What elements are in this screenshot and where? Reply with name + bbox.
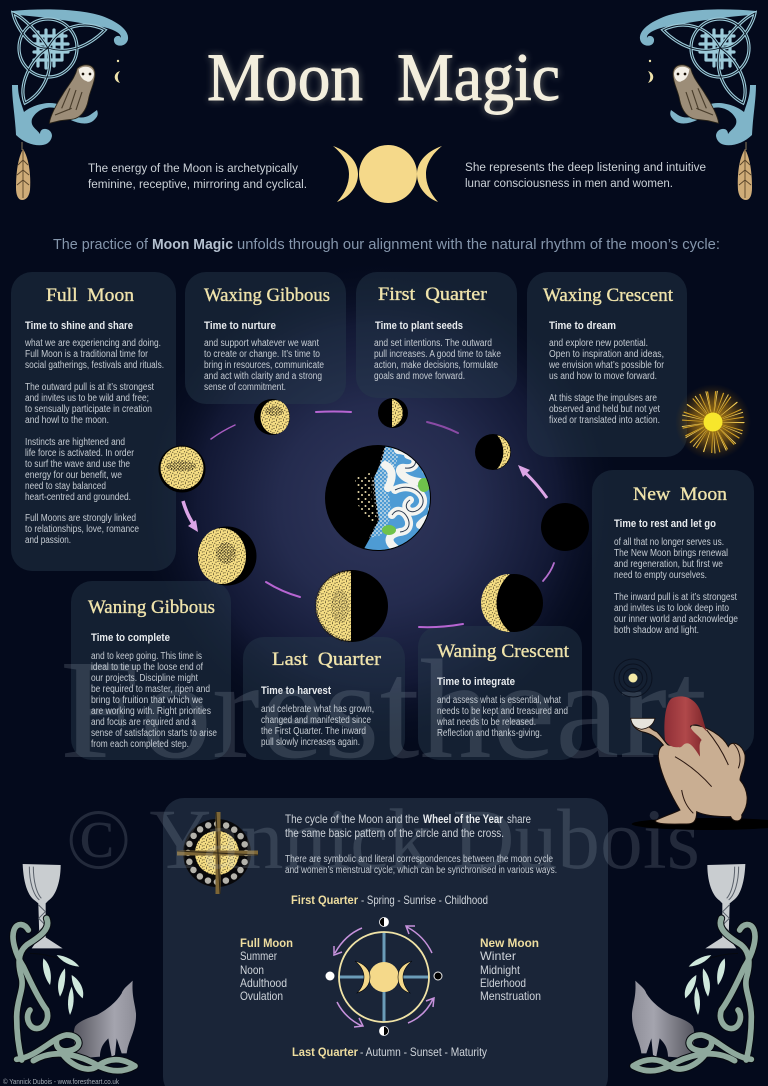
text: waning crescent: Time to integrate [437, 676, 515, 688]
text: waxing gibbous [204, 320, 324, 393]
intro text left [88, 161, 307, 191]
text: waning gibbous: sense of satisfaction starts to arise [91, 728, 217, 739]
text: last quarter: the First Quarter. The inward [261, 726, 366, 737]
ornament: top left knot, owl and feather [12, 9, 128, 200]
text: full moon: need to stay balanced [25, 481, 106, 492]
small moon: full [326, 972, 334, 980]
text: waning gibbous: and to keep going. This time is [91, 651, 202, 662]
text: wheel intro [285, 813, 557, 876]
intro text right: lunar consciousness in men and women. [465, 176, 673, 190]
ornament: bottom left chalice, vine and wolf [13, 864, 136, 1071]
label: first quarter correspondences: - Spring - Sunrise - Childhood [361, 894, 488, 907]
heading: waning crescent: Waning Crescent [437, 641, 570, 662]
text: new moon: our inner world and acknowledge [614, 614, 738, 625]
text: wheel intro: There are symbolic and literal correspondences between the moon cycle [285, 854, 553, 865]
icon: chalice [23, 864, 63, 948]
label: first quarter correspondences: First Quarter [291, 893, 358, 907]
label: last quarter correspondences: Last Quarter [292, 1045, 358, 1059]
text: full moon: social gatherings, festivals and rituals. [25, 360, 164, 371]
intro text left: The energy of the Moon is archetypically [88, 161, 299, 175]
ornament: top right knot, owl and feather [640, 9, 756, 200]
heading: waning gibbous: Waning Gibbous [88, 597, 215, 618]
text: full moon: Time to shine and share [25, 320, 133, 332]
moon: new [541, 503, 589, 551]
text: full moon: to sensually participate in creation [25, 404, 152, 415]
text: new moon: and regeneration, but first we [614, 559, 723, 570]
text: waxing crescent [548, 320, 665, 426]
panel: waxing gibbous [185, 272, 346, 404]
text: full moon: life force is activated. In order [25, 448, 135, 459]
text: last quarter: and celebrate what has grown, [261, 704, 374, 715]
text: waxing crescent: we envision what’s possible for [548, 360, 665, 371]
heading: new moon: New Moon [633, 484, 728, 505]
panel: full moon [11, 272, 176, 571]
heading: first quarter: First Quarter [378, 284, 488, 305]
text: waning crescent: needs to be kept and treasured and [437, 706, 568, 717]
text: waxing crescent: Time to dream [549, 320, 616, 332]
text: new moon: need to empty ourselves. [614, 570, 707, 581]
text: waxing gibbous: Time to nurture [204, 320, 276, 332]
text: waning gibbous: bring to fruition that which we [91, 695, 203, 706]
panel: waning gibbous [71, 581, 231, 760]
woman's body [632, 720, 747, 824]
text: new moon: of all that no longer serves us. [614, 537, 724, 548]
text: last quarter: changed and manifested since [261, 715, 371, 726]
text: waning gibbous: and focus are required and a [91, 717, 196, 728]
subtitle: Moon Magic [152, 237, 233, 253]
scroll arm [12, 9, 128, 46]
text: waxing gibbous: sense of commitment. [204, 382, 286, 393]
text: full moon: energy for our benefit, we [25, 470, 122, 481]
text: waning crescent: and assess what is essential, what [437, 695, 561, 706]
text: first quarter: goals and move forward. [374, 371, 465, 382]
text: new moon [614, 518, 738, 636]
text: waxing gibbous: bring in resources, communicate [204, 360, 324, 371]
text: first quarter: action, make decisions, formulate [374, 360, 498, 371]
heading: waxing gibbous: Waxing Gibbous [204, 285, 330, 306]
label: full moon correspondences: Full Moon [240, 936, 293, 950]
text: waning gibbous [91, 632, 217, 750]
small moon: last quarter [380, 1026, 388, 1036]
text: wheel intro: and women’s menstrual cycle, which can be synchronised in various ways. [285, 865, 557, 876]
text: waning gibbous: be required to master, ripen and [91, 684, 210, 695]
intro text left: feminine, receptive, mirroring and cyclical. [88, 177, 307, 191]
icon: vine knotwork [13, 918, 135, 1071]
icon: feather [16, 142, 30, 200]
icon: spiral moon [614, 659, 652, 697]
text: waxing crescent: Open to inspiration and ideas, [549, 349, 664, 360]
moon: waning crescent [481, 574, 543, 632]
label: new moon correspondences: New Moon [480, 936, 539, 950]
text: waning gibbous: Time to complete [91, 632, 170, 644]
text: waxing crescent: us and how to move forward. [549, 371, 657, 382]
label: new moon correspondences: Elderhood [480, 977, 526, 990]
moon: first quarter [378, 398, 408, 428]
heading: full moon: Full Moon [46, 285, 135, 306]
panel: wheel of the year [163, 798, 608, 1086]
text: waxing gibbous: to create or change. It’s time to [204, 349, 320, 360]
label: full moon correspondences: Noon [240, 964, 264, 977]
text: first quarter: Time to plant seeds [375, 320, 463, 332]
text: full moon [24, 320, 164, 546]
text: new moon: The New Moon brings renewal [614, 548, 728, 559]
text: full moon: Full Moons are strongly linked [25, 513, 136, 524]
text: full moon: Full Moon is a traditional time for [25, 349, 149, 360]
small moon: new [434, 972, 442, 980]
label: new moon correspondences: Midnight [480, 964, 521, 977]
chart: moon phase cycle [158, 398, 589, 642]
watermark: forestheart: Forestheart [60, 630, 707, 788]
label: last quarter correspondences [292, 1045, 487, 1059]
arrow: waxing crescent [518, 465, 547, 498]
text: wheel intro: share [507, 813, 531, 826]
woman's hair [664, 696, 707, 757]
heading: waxing crescent: Waxing Crescent [543, 285, 674, 306]
panel: new moon [592, 470, 754, 755]
central glow behind moon cycle [128, 255, 628, 755]
panel: first quarter [356, 272, 517, 398]
icon: leaves [30, 953, 83, 1015]
label: first quarter correspondences [291, 893, 488, 907]
text: full moon: The outward pull is at it’s strongest [25, 382, 154, 393]
icon: wolf [74, 981, 136, 1058]
ornament: bottom right chalice, vine and wolf [632, 864, 755, 1071]
text: full moon: to surf the wave and use the [25, 459, 130, 470]
label: new moon correspondences [480, 936, 541, 1003]
moon: last quarter [316, 570, 388, 642]
main title: Magic [397, 39, 560, 115]
illustration: woman with bowl [631, 696, 768, 830]
main title [207, 39, 560, 115]
arrow dashes of the cycle [211, 412, 554, 627]
text: wheel intro: the same basic pattern of the circle and the cross. [285, 827, 504, 840]
heading: last quarter: Last Quarter [272, 649, 382, 670]
text: waning gibbous: from each completed step. [91, 739, 189, 750]
text: full moon: and invites us to be wild and free; [25, 393, 149, 404]
text: waxing crescent: At this stage the impulses are [549, 393, 657, 404]
text: waning gibbous: are working with. Right priorities [91, 706, 211, 717]
label: full moon correspondences: Adulthood [240, 977, 287, 990]
text: full moon: heart-centred and grounded. [25, 492, 131, 503]
arrow: waning gibbous [183, 501, 198, 532]
knotwork [13, 13, 105, 103]
label: full moon correspondences: Ovulation [240, 990, 283, 1003]
text: first quarter [374, 320, 501, 382]
text: new moon: Time to rest and let go [614, 518, 716, 530]
label: new moon correspondences: Winter [480, 950, 516, 963]
panel: waxing crescent [527, 272, 687, 457]
text: waxing gibbous: and support whatever we want [204, 338, 319, 349]
cycle arrows [334, 926, 434, 1027]
moon: waxing gibbous [254, 399, 290, 435]
text: waning gibbous: our projects. Discipline might [91, 673, 198, 684]
intro text right: She represents the deep listening and intuitive [465, 160, 706, 174]
panel: waning crescent [418, 626, 582, 760]
bowl [631, 718, 655, 729]
text: new moon: and invites us to look deep into [614, 603, 729, 614]
label: last quarter correspondences: - Autumn - Sunset - Maturity [360, 1046, 487, 1059]
text: waning crescent: Reflection and thanks-giving. [437, 728, 542, 739]
small moon: first quarter [380, 918, 388, 926]
icon: sun [675, 384, 751, 460]
text: waning crescent: what needs to be released. [436, 717, 536, 728]
credit line: © Yannick Dubois - www.forestheart.co.uk [3, 1077, 119, 1086]
text: first quarter: pull increases. A good time to take [374, 349, 501, 360]
text: last quarter [261, 685, 374, 748]
text: waxing crescent: and explore new potential. [549, 338, 648, 349]
text: full moon: what we are experiencing and doing. [24, 338, 161, 349]
text: full moon: to relationships, love, romance [25, 524, 139, 535]
subtitle: unfolds through our alignment with the natural rhythm of the moon’s cycle: [237, 237, 720, 253]
moon: earth centre [325, 445, 431, 551]
moon: full [158, 446, 206, 492]
diagram: wheel of the year [326, 918, 442, 1036]
text: wheel intro: The cycle of the Moon and the [285, 813, 419, 826]
intro text right [465, 160, 706, 190]
moon: waning gibbous [198, 526, 256, 586]
icon: small moon and star [115, 60, 120, 83]
text: new moon: both shadow and light. [614, 625, 699, 636]
text: full moon: Instincts are hightened and [25, 437, 125, 448]
text: waxing crescent: fixed or translated into action. [549, 415, 660, 426]
label: new moon correspondences: Menstruation [480, 990, 541, 1003]
text: new moon: The inward pull is at it’s strongest [614, 592, 737, 603]
text: waning crescent [436, 676, 568, 739]
watermark: copyright: © Yannick Dubois [66, 791, 700, 887]
icon: brigid's cross wheel [177, 812, 258, 894]
label: full moon correspondences: Summer [240, 950, 277, 963]
panel: last quarter [243, 637, 405, 760]
icon: triple moon [333, 145, 442, 203]
moon: waxing crescent [475, 434, 511, 470]
text: first quarter: and set intentions. The outward [374, 338, 492, 349]
text: last quarter: pull slowly increases again. [261, 737, 360, 748]
subtitle: The practice of [53, 237, 149, 253]
text: waxing crescent: observed and held but not yet [549, 404, 660, 415]
main title: Moon [207, 39, 363, 115]
text: full moon: and howl to the moon. [25, 415, 109, 426]
label: full moon correspondences [240, 936, 293, 1003]
text: last quarter: Time to harvest [261, 685, 331, 697]
text: waning gibbous: ideal to tie up the loose end of [91, 662, 203, 673]
text: full moon: and passion. [25, 535, 71, 546]
text: wheel intro: Wheel of the Year [423, 813, 503, 826]
text: waxing gibbous: and act with clarity and a strong [204, 371, 322, 382]
icon: owl [49, 65, 95, 123]
